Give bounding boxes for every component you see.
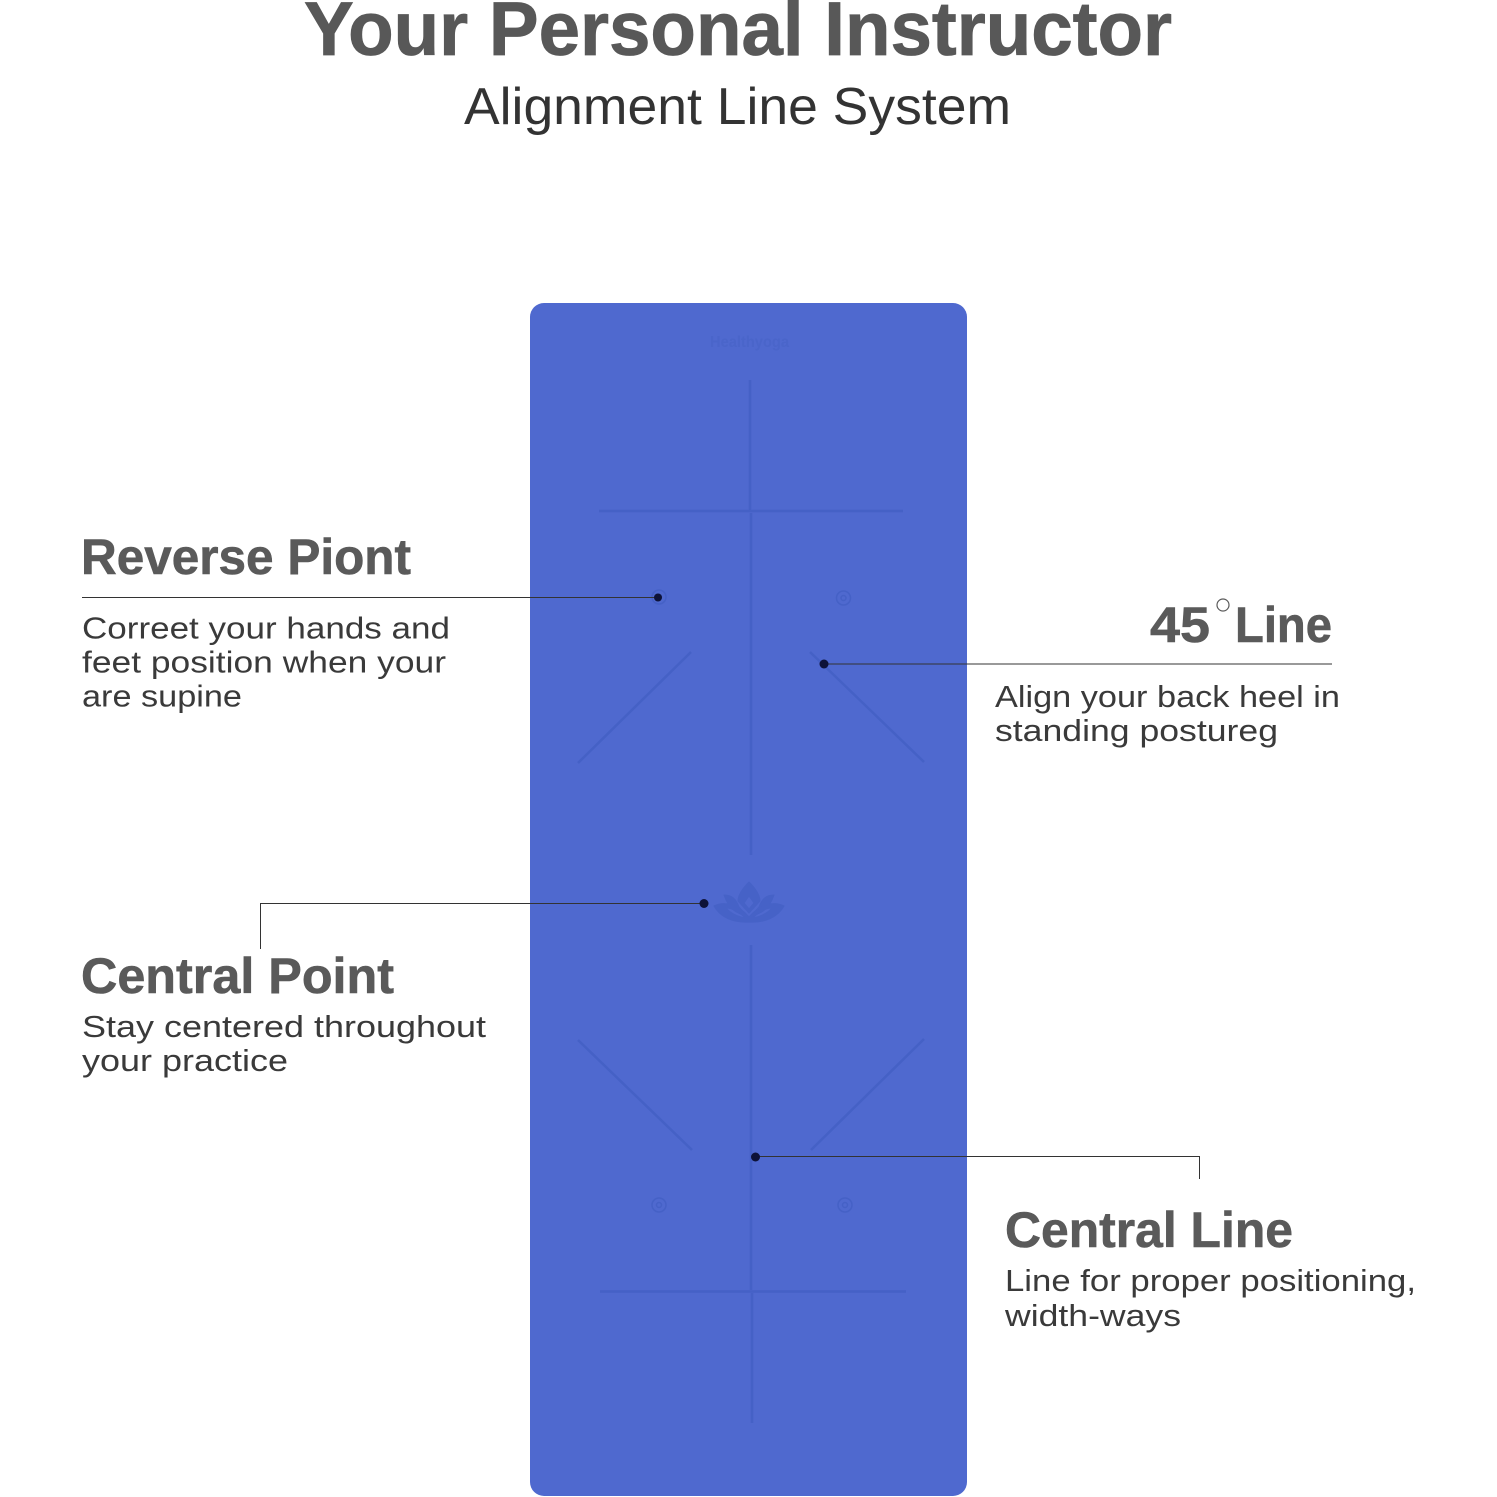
leader: central point — [260, 899, 708, 949]
reverse point markers — [652, 590, 852, 1212]
heading: central point: Central Point — [81, 948, 394, 1004]
yoga mat — [530, 303, 967, 1496]
callout: central point — [81, 899, 708, 1078]
description: reverse point — [82, 610, 450, 714]
heading: 45 degree line — [1150, 597, 1332, 653]
callout: central line — [751, 1152, 1416, 1333]
description: reverse point: are supine — [82, 678, 242, 714]
subtitle: Alignment Line System — [464, 78, 1011, 136]
description: central point: your practice — [82, 1043, 288, 1078]
description: central point: Stay centered throughout — [82, 1009, 486, 1044]
heading: 45 degree line: 45 — [1150, 597, 1210, 653]
leader: 45 degree line — [820, 660, 1332, 668]
description: central line: Line for proper positioning, — [1005, 1263, 1416, 1298]
callout: reverse point — [81, 529, 662, 714]
leader: reverse point — [82, 594, 662, 602]
description: central point — [82, 1009, 486, 1078]
mat brand text: Healthyoga — [710, 334, 789, 351]
heading: 45 degree line: Line — [1235, 597, 1332, 653]
callout: 45 degree line — [820, 597, 1340, 748]
heading: central line: Central Line — [1005, 1202, 1293, 1258]
description: central line: width-ways — [1004, 1298, 1181, 1333]
alignment lines — [578, 380, 924, 1423]
description: 45 degree line — [995, 679, 1340, 748]
leader: central line — [751, 1152, 1200, 1179]
heading: reverse point: Reverse Piont — [81, 529, 411, 585]
description: reverse point: feet position when your — [82, 644, 446, 680]
description: 45 degree line: Align your back heel in — [995, 679, 1340, 714]
icon: lotus — [714, 882, 784, 922]
description: 45 degree line: standing postureg — [995, 713, 1278, 748]
description: central line — [1004, 1263, 1416, 1333]
description: reverse point: Correet your hands and — [82, 610, 450, 646]
